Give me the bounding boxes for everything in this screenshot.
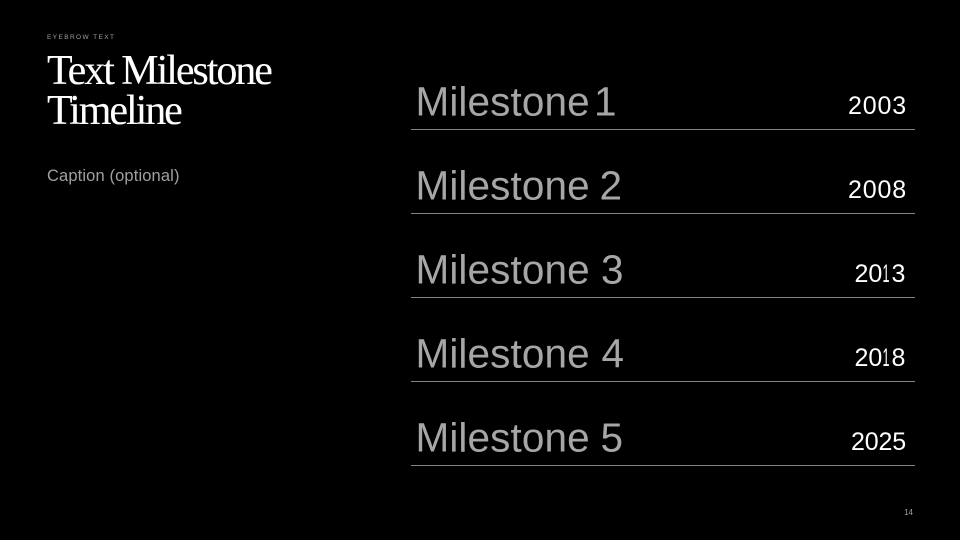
milestone 4 row: Milestone — [416, 330, 590, 376]
milestone 1 row: 1 — [594, 78, 617, 124]
milestone 3 row: 1 — [882, 260, 890, 288]
milestone 5 row: Milestone — [416, 414, 590, 460]
milestone 3 row — [411, 246, 915, 298]
milestone 1 row — [411, 78, 915, 130]
milestone 4 row: 20 — [854, 344, 882, 372]
milestone 4 row: 4 — [602, 330, 624, 376]
milestone 3 row: 3 — [892, 260, 905, 288]
eyebrow text: EYEBROW TEXT — [47, 34, 115, 41]
milestone 5 row: 5 — [600, 414, 623, 460]
milestone 2 row — [411, 162, 915, 214]
milestone list — [411, 78, 915, 466]
milestone 3 row: 20 — [854, 260, 882, 288]
milestone 5 row: 2025 — [851, 428, 906, 456]
milestone 3 row: Milestone — [416, 246, 590, 292]
milestone 2 row: 2 — [600, 162, 622, 208]
page number: 14 — [904, 508, 914, 517]
milestone 3 row: 3 — [601, 246, 624, 292]
milestone 4 row — [411, 330, 915, 382]
milestone 5 row — [411, 414, 915, 466]
milestone 4 row: 1 — [882, 344, 890, 372]
milestone 1 row: Milestone — [416, 78, 590, 124]
milestone 2 row: Milestone — [416, 162, 590, 208]
title: Timeline — [47, 88, 182, 134]
title: Text Milestone — [47, 48, 272, 94]
title — [47, 48, 272, 134]
milestone 1 row: 2003 — [848, 92, 906, 120]
milestone 4 row: 8 — [892, 344, 905, 372]
milestone 2 row: 2008 — [848, 176, 906, 204]
caption: Caption (optional) — [47, 167, 180, 185]
